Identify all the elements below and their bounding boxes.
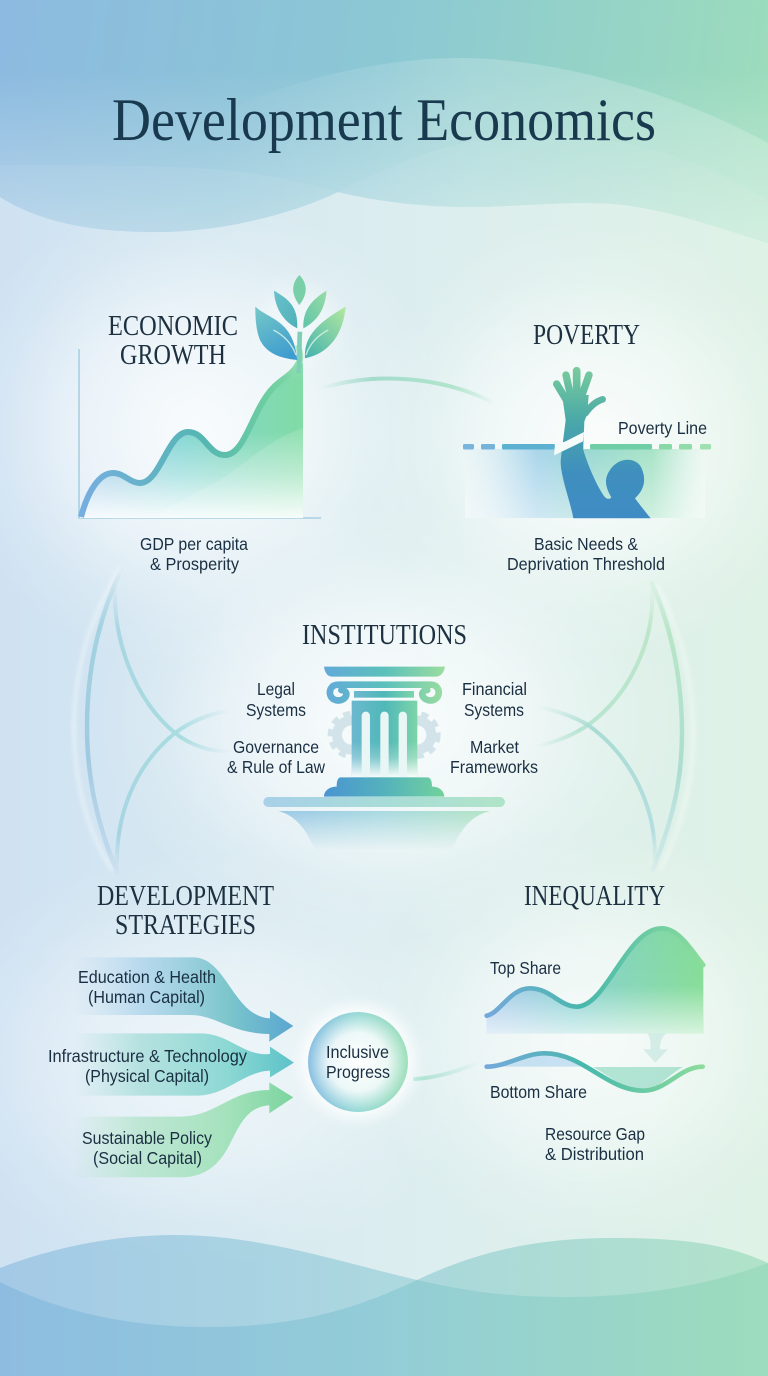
labels: institutions left: & Rule of Law — [227, 757, 325, 777]
heading: poverty: POVERTY — [533, 319, 640, 351]
chart: growth curve — [79, 345, 321, 518]
poverty line dashes — [463, 444, 711, 450]
arrow: physical capital — [73, 1033, 294, 1096]
arrow: human capital — [73, 957, 293, 1042]
heading: economic growth — [108, 310, 238, 371]
gears — [330, 713, 438, 757]
down arrow — [643, 1033, 668, 1063]
arrows: three flows — [73, 957, 294, 1177]
heading: economic growth: GROWTH — [120, 339, 226, 371]
labels: institutions right: Market — [470, 737, 519, 757]
text: inequality caption: & Distribution — [545, 1144, 644, 1164]
connector arcs — [74, 379, 693, 1079]
heading: economic growth: ECONOMIC — [108, 310, 238, 342]
bottom gap fill — [593, 1067, 683, 1091]
water below the line — [465, 449, 705, 518]
flutes — [362, 712, 407, 778]
top wave band — [0, 0, 768, 243]
bottom wave band — [0, 1235, 768, 1376]
labels: shares: Top Share — [490, 958, 561, 978]
labels: strategies — [48, 967, 247, 1168]
panel: institutions — [227, 619, 538, 858]
heading: inequality: INEQUALITY — [524, 880, 665, 912]
labels: institutions left — [227, 679, 325, 777]
labels: strategies: (Physical Capital) — [85, 1066, 209, 1086]
arrow: social capital — [73, 1082, 293, 1177]
text: gdp caption: GDP per capita — [140, 534, 248, 554]
capital top — [324, 667, 445, 677]
heading: development strategies: STRATEGIES — [115, 909, 256, 941]
panel: inequality — [487, 880, 703, 1164]
column base — [324, 777, 444, 797]
platform — [263, 797, 505, 807]
labels: shares: Bottom Share — [490, 1082, 587, 1102]
labels: institutions left: Governance — [233, 737, 319, 757]
labels: strategies: (Human Capital) — [88, 987, 205, 1007]
panel: poverty — [463, 319, 711, 574]
text: poverty caption: Deprivation Threshold — [507, 554, 665, 574]
labels: strategies: Sustainable Policy — [82, 1128, 212, 1148]
labels: strategies: Infrastructure & Technology — [48, 1046, 247, 1066]
chart: top and bottom share — [487, 928, 703, 1091]
labels: institutions right: Frameworks — [450, 757, 538, 777]
column shaft — [352, 701, 417, 777]
text: poverty caption — [507, 534, 665, 574]
text: gdp caption — [140, 534, 248, 574]
text: poverty caption: Basic Needs & — [534, 534, 638, 554]
label: inclusive progress — [326, 1042, 390, 1082]
heading: development strategies: DEVELOPMENT — [97, 880, 274, 912]
labels: institutions left: Systems — [246, 700, 306, 720]
node: inclusive progress — [300, 1004, 416, 1120]
volutes — [330, 685, 439, 700]
title: Development Economics — [112, 87, 656, 153]
labels: institutions right: Systems — [464, 700, 524, 720]
labels: strategies: (Social Capital) — [93, 1148, 202, 1168]
label: poverty line: Poverty Line — [618, 418, 707, 438]
icon: pillar with gears — [263, 667, 505, 858]
panel: development strategies — [48, 880, 294, 1177]
labels: institutions left: Legal — [257, 679, 295, 699]
labels: institutions right: Financial — [462, 679, 527, 699]
label: inclusive progress: Progress — [326, 1062, 390, 1082]
icon: drowning figure reaching up — [554, 371, 651, 518]
text: inequality caption: Resource Gap — [545, 1124, 645, 1144]
labels: institutions right — [450, 679, 538, 777]
labels: strategies: Education & Health — [78, 967, 216, 987]
panel: economic growth — [79, 267, 357, 574]
text: inequality caption — [545, 1124, 645, 1164]
text: gdp caption: & Prosperity — [150, 554, 239, 574]
icon: sprout leaves — [243, 267, 357, 380]
pedestal — [278, 811, 490, 846]
label: inclusive progress: Inclusive — [326, 1042, 389, 1062]
heading: institutions: INSTITUTIONS — [302, 619, 467, 651]
labels: shares — [490, 958, 587, 1102]
heading: development strategies — [97, 880, 274, 941]
